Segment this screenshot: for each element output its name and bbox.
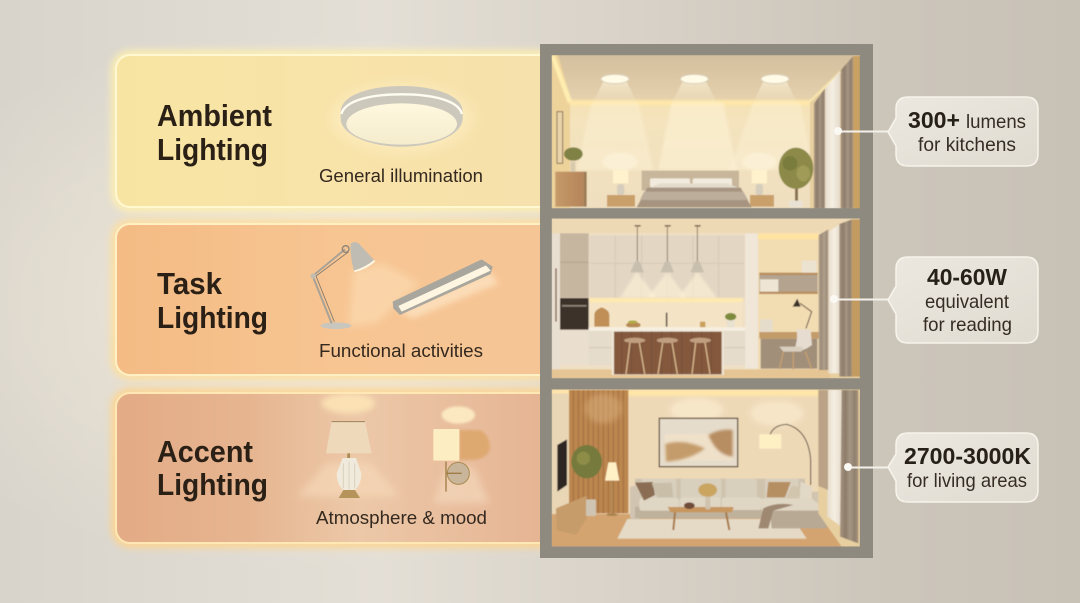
icon: wall sconce [433, 406, 490, 503]
callout: 300+ lumens for kitchens: 300+ [908, 107, 960, 133]
building cross-section frame [540, 44, 873, 558]
heading: accent lighting: Lighting [157, 467, 268, 502]
room: living room with accent lighting [552, 389, 860, 547]
lower cabinets and island [589, 327, 746, 375]
potted plant [779, 148, 813, 207]
bar stools [624, 338, 711, 374]
framed artwork [659, 418, 738, 467]
icon: under-cabinet light bar [393, 259, 498, 318]
column and study nook [745, 233, 819, 370]
text: atmosphere and mood: Atmosphere & mood [316, 507, 487, 528]
icon: table lamp [297, 393, 400, 498]
text: general illumination: General illumination [319, 165, 483, 186]
heading: ambient lighting: Lighting [157, 132, 268, 167]
callout: 2700-3000K for living areas: 2700-3000K [904, 443, 1031, 469]
callout: 300+ lumens for kitchens [834, 97, 1038, 166]
sofa [630, 479, 827, 528]
heading: task lighting [157, 266, 268, 335]
heading: ambient lighting [157, 98, 272, 167]
callout: 2700-3000K for living areas [844, 433, 1038, 502]
right wall, window and curtains [810, 55, 860, 208]
ceiling with cove [552, 55, 860, 102]
tv, console, plant and table lamp [556, 439, 619, 535]
wood slat wall [569, 390, 628, 513]
icon: ceiling light [330, 83, 473, 153]
upper cabinets [589, 235, 745, 298]
bed [637, 171, 752, 207]
heading: ambient lighting: Ambient [157, 98, 272, 133]
text: functional activities: Functional activities [319, 340, 483, 361]
room: kitchen with task lighting [552, 218, 860, 378]
callout: 2700-3000K for living areas: for living areas [907, 470, 1027, 492]
wall wash spots [670, 398, 803, 426]
floor and rug [552, 514, 860, 547]
callout: 40-60W equivalent for reading: for reading [923, 314, 1012, 336]
window and curtains [818, 389, 860, 547]
bedside lamps [603, 153, 777, 207]
window and curtains [819, 218, 860, 378]
floor [552, 369, 837, 378]
heading: accent lighting: Accent [157, 434, 253, 469]
icon: desk lamp [311, 242, 420, 329]
panel: accent lighting [116, 393, 556, 543]
arc floor lamp [759, 424, 811, 485]
downlight beams [577, 74, 813, 170]
tall cabinets and oven [556, 233, 589, 365]
callout: 40-60W equivalent for reading: equivalent [925, 291, 1010, 313]
callout: 40-60W equivalent for reading: 40-60W [927, 264, 1007, 290]
under-cabinet backsplash glow [589, 298, 743, 328]
panel: task lighting [116, 224, 556, 375]
pendant lights [630, 225, 704, 272]
panel: ambient lighting [116, 55, 556, 207]
callout: 300+ lumens for kitchens: lumens [966, 111, 1026, 133]
heading: task lighting: Lighting [157, 300, 268, 335]
callout: 40-60W equivalent for reading [830, 257, 1038, 343]
dresser, plant and picture [555, 112, 587, 207]
coffee table and flowers [668, 483, 734, 530]
heading: task lighting: Task [157, 266, 223, 301]
callout: 300+ lumens for kitchens: for kitchens [918, 134, 1016, 156]
room: bedroom with ambient lighting [552, 55, 860, 208]
desk lamp and chair [779, 299, 812, 370]
heading: accent lighting [157, 434, 268, 502]
